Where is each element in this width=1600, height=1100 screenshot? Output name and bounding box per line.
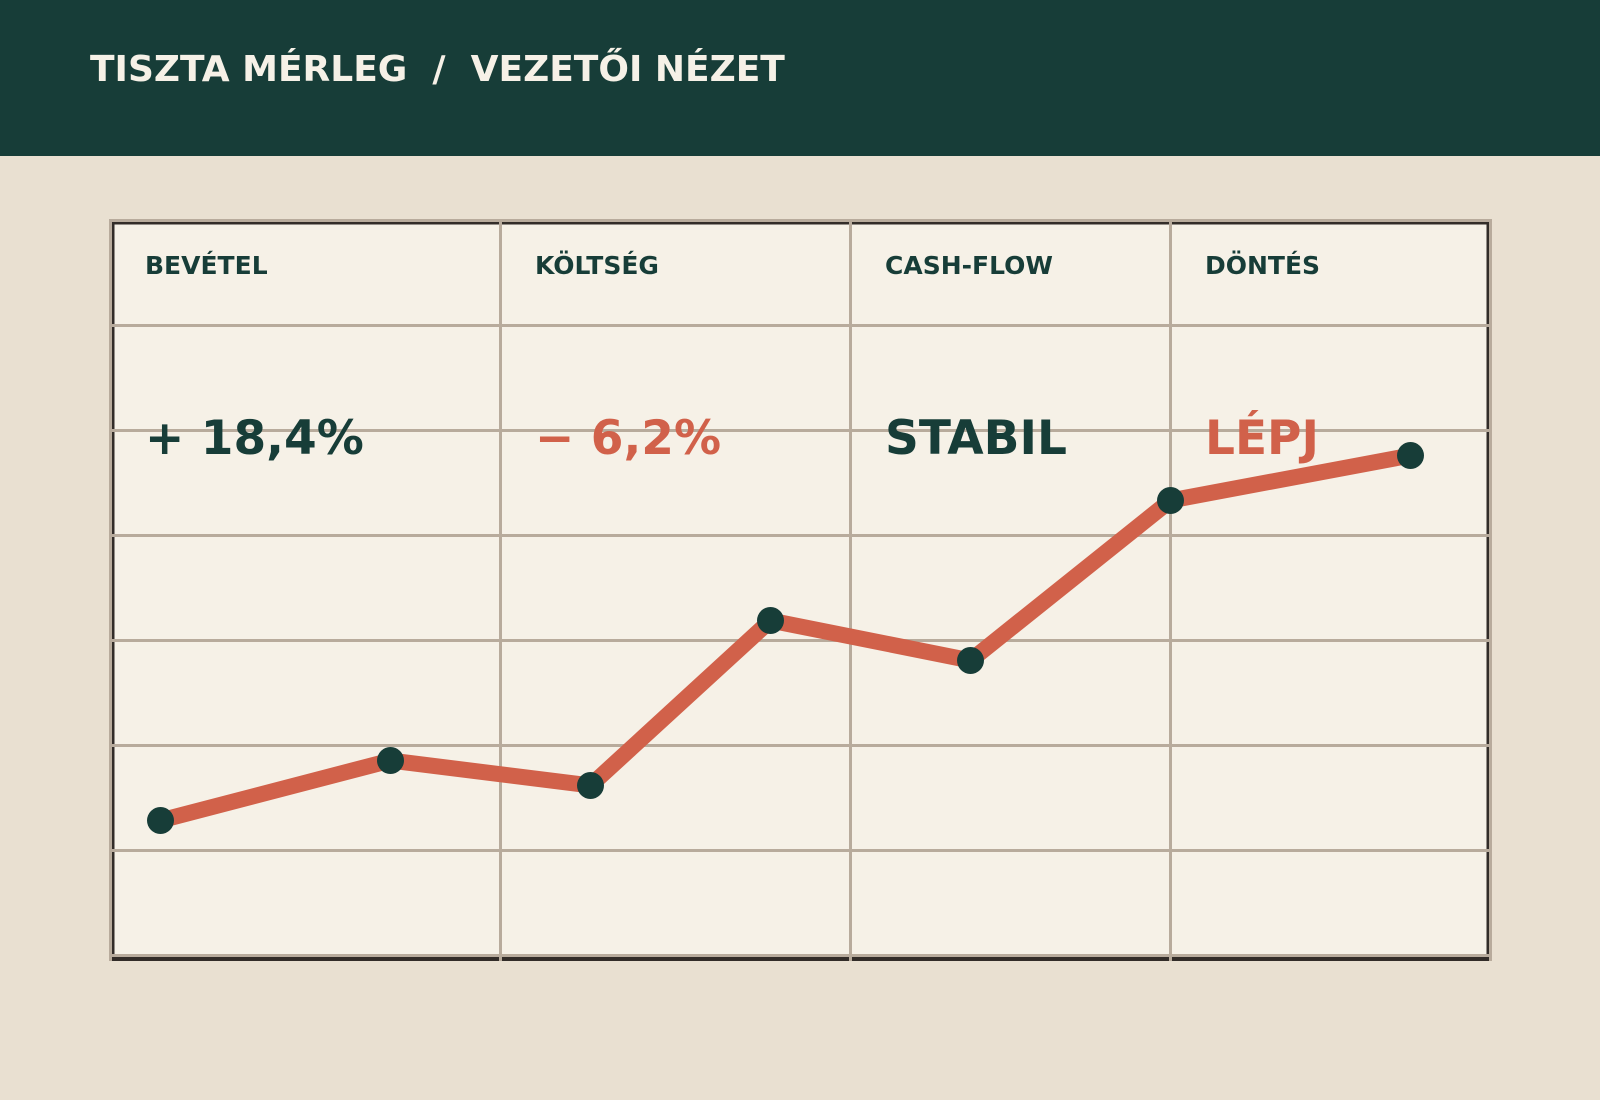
label: Bevétel: BEVÉTEL [145, 251, 268, 280]
panel: table with chart [110, 219, 1490, 961]
label: Költség: KÖLTSÉG [535, 250, 659, 280]
column labels [145, 250, 1320, 280]
value: cost change: − 6,2% [535, 411, 721, 466]
trend line [160, 456, 1410, 820]
label: Döntés: DÖNTÉS [1205, 250, 1320, 280]
data points [147, 442, 1424, 834]
line chart [147, 442, 1424, 834]
column values [145, 411, 1319, 466]
value: cash-flow status: STABIL [885, 411, 1067, 466]
header band [0, 0, 1600, 156]
value: revenue change: + 18,4% [145, 411, 364, 466]
title: TISZTA MÉRLEG / VEZETŐI NÉZET [90, 48, 785, 90]
label: Cash-flow: CASH-FLOW [885, 251, 1053, 280]
value: decision: LÉPJ [1205, 411, 1319, 466]
